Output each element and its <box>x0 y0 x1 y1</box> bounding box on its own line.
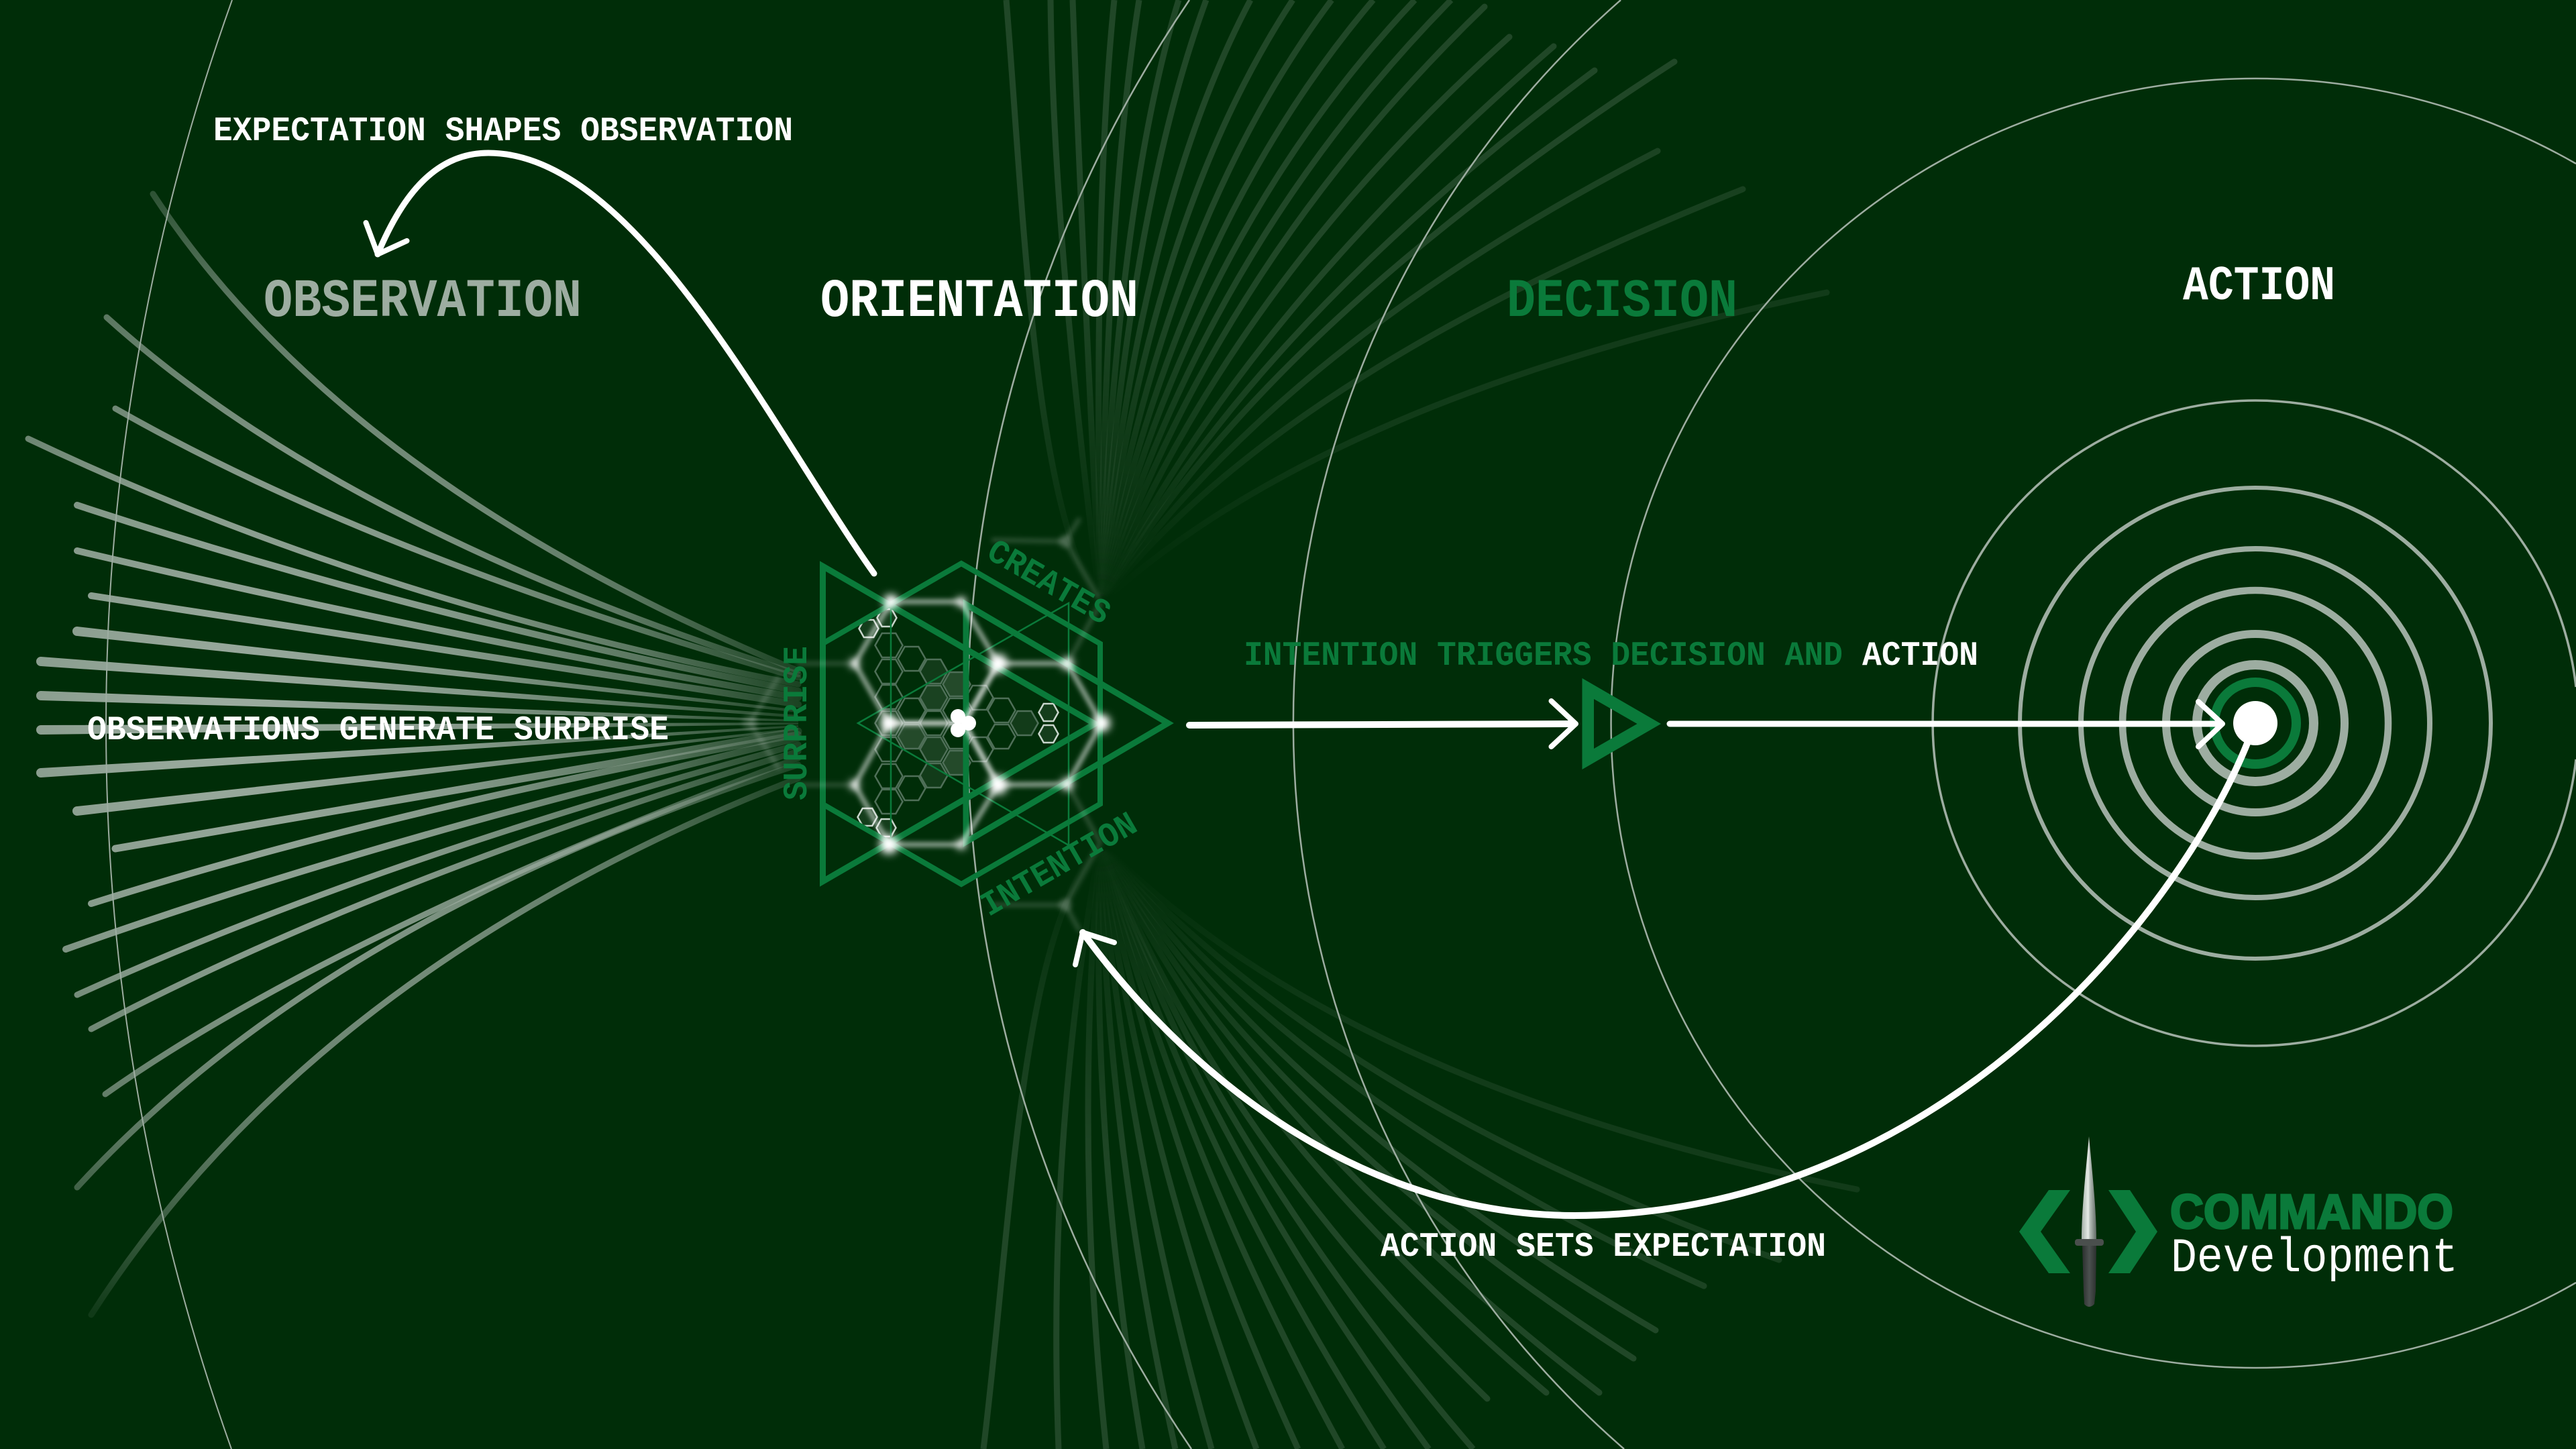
heading: orientation: ORIENTATION <box>820 272 1138 333</box>
caption: action sets expectation: ACTION SETS EXPECTATION <box>1381 1228 1826 1267</box>
arrow: orientation to decision <box>1189 701 1576 747</box>
label: surprise: SURPRISE <box>779 646 817 800</box>
heading: action: ACTION <box>2183 259 2335 314</box>
central white node <box>951 709 976 737</box>
green triangles and hexagon <box>822 564 1168 884</box>
caption: intention triggers decision and action: ACTION <box>1862 637 1978 676</box>
label: intention: INTENTION <box>975 806 1144 926</box>
caption: expectation shapes observation: EXPECTATION SHAPES OBSERVATION <box>213 113 793 151</box>
glowing hexagon network <box>850 594 1110 854</box>
observation ray fan <box>28 194 798 1315</box>
wordmark subtitle: Development <box>2171 1231 2458 1286</box>
icon: dagger <box>2075 1136 2104 1307</box>
arrow: expectation shapes observation <box>366 153 874 574</box>
decision triangle <box>1582 678 1661 769</box>
wordmark: COMMANDO <box>2170 1185 2453 1239</box>
action dot <box>2233 701 2277 745</box>
heading: decision: DECISION <box>1507 272 1737 333</box>
caption: intention triggers decision and action: INTENTION TRIGGERS DECISION AND <box>1244 637 1843 676</box>
orientation bottom ray fan <box>983 843 1857 1449</box>
arrow: decision to action <box>1670 702 2222 747</box>
arrow: action sets expectation <box>1075 731 2252 1216</box>
surprise cell hexagon cluster <box>857 609 1059 837</box>
green inner ring <box>2214 682 2296 764</box>
heading: observation: OBSERVATION <box>264 272 582 333</box>
logo: commando development <box>2019 1136 2458 1307</box>
caption: observations generate surprise: OBSERVATIONS GENERATE SURPRISE <box>87 712 669 750</box>
faint hexagon ghosts <box>742 520 1100 929</box>
orientation top ray fan <box>1006 0 1827 604</box>
highlighted small hexagons <box>857 609 1059 837</box>
icon: code chevrons <box>2019 1190 2157 1273</box>
label: creates: CREATES <box>980 533 1116 634</box>
